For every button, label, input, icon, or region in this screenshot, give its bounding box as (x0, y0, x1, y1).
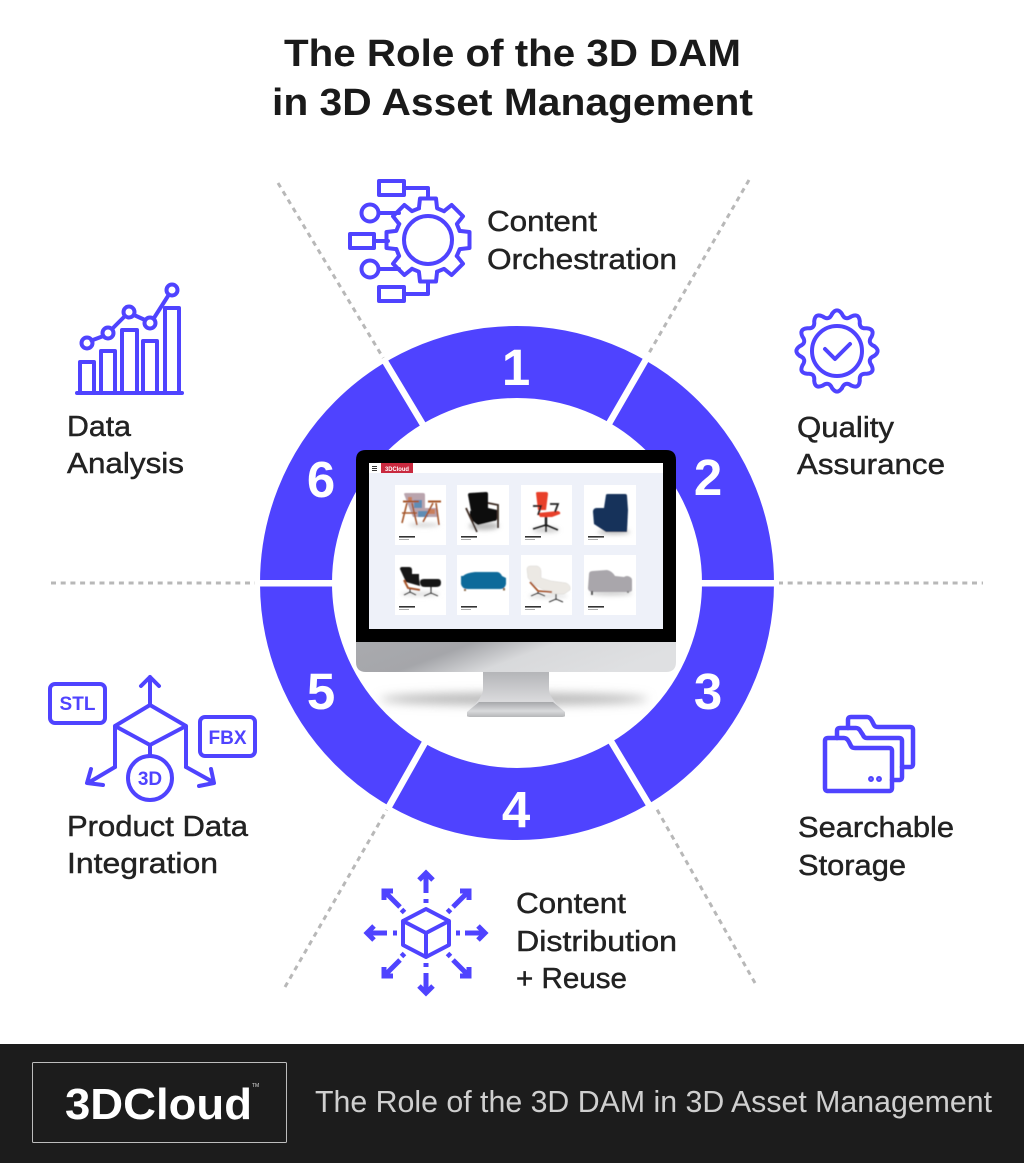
numbered ring: 4 (502, 781, 531, 838)
numbered ring (255, 339, 779, 838)
numbered ring: 5 (307, 663, 335, 720)
footer (0, 1044, 1024, 1163)
footer tagline: The Role of the 3D DAM in 3D Asset Management (315, 1084, 992, 1119)
numbered ring: 3 (694, 663, 722, 720)
label: quality assurance: Assurance (797, 449, 945, 481)
icon: product data cube: STL (60, 694, 96, 715)
label: content orchestration: Content (487, 206, 597, 238)
label: content distribution + reuse: Content (516, 888, 626, 920)
label: product data integration: Integration (67, 848, 218, 880)
label: product data integration (67, 811, 249, 880)
label: content orchestration: Orchestration (487, 244, 677, 276)
label: searchable storage: Storage (798, 850, 906, 882)
label: content orchestration (487, 206, 677, 276)
icon: quality badge (796, 310, 878, 392)
label: content distribution + reuse (516, 888, 677, 995)
label: data analysis (67, 411, 184, 480)
logo box: TM (252, 1083, 259, 1089)
numbered ring: 2 (694, 449, 722, 506)
icon: distribution cube with arrows (367, 873, 485, 993)
icon: folders (825, 717, 913, 791)
icon: product data cube: 3D (138, 769, 162, 790)
icon: gear with connectors (350, 181, 470, 301)
label: data analysis: Data (67, 411, 132, 443)
label: quality assurance (797, 412, 945, 481)
title: in 3D Asset Management (272, 82, 753, 124)
title (272, 33, 753, 124)
label: quality assurance: Quality (797, 412, 895, 444)
logo box: 3DCloud (65, 1080, 252, 1129)
monitor (356, 450, 676, 717)
label: content distribution + reuse: Distribution (516, 926, 677, 958)
label: product data integration: Product Data (67, 811, 249, 843)
label: data analysis: Analysis (67, 448, 184, 480)
numbered ring: 1 (502, 339, 530, 396)
label: searchable storage: Searchable (798, 812, 954, 844)
monitor: 3DCloud (385, 466, 409, 473)
icon: product data cube: FBX (208, 728, 247, 749)
numbered ring: 6 (307, 451, 335, 508)
icon: product data cube (50, 677, 255, 800)
icon: bar chart with trend line (77, 284, 182, 393)
label: content distribution + reuse: + Reuse (516, 963, 627, 995)
title: The Role of the 3D DAM (284, 33, 741, 75)
label: searchable storage (798, 812, 954, 882)
logo box (32, 1062, 286, 1142)
